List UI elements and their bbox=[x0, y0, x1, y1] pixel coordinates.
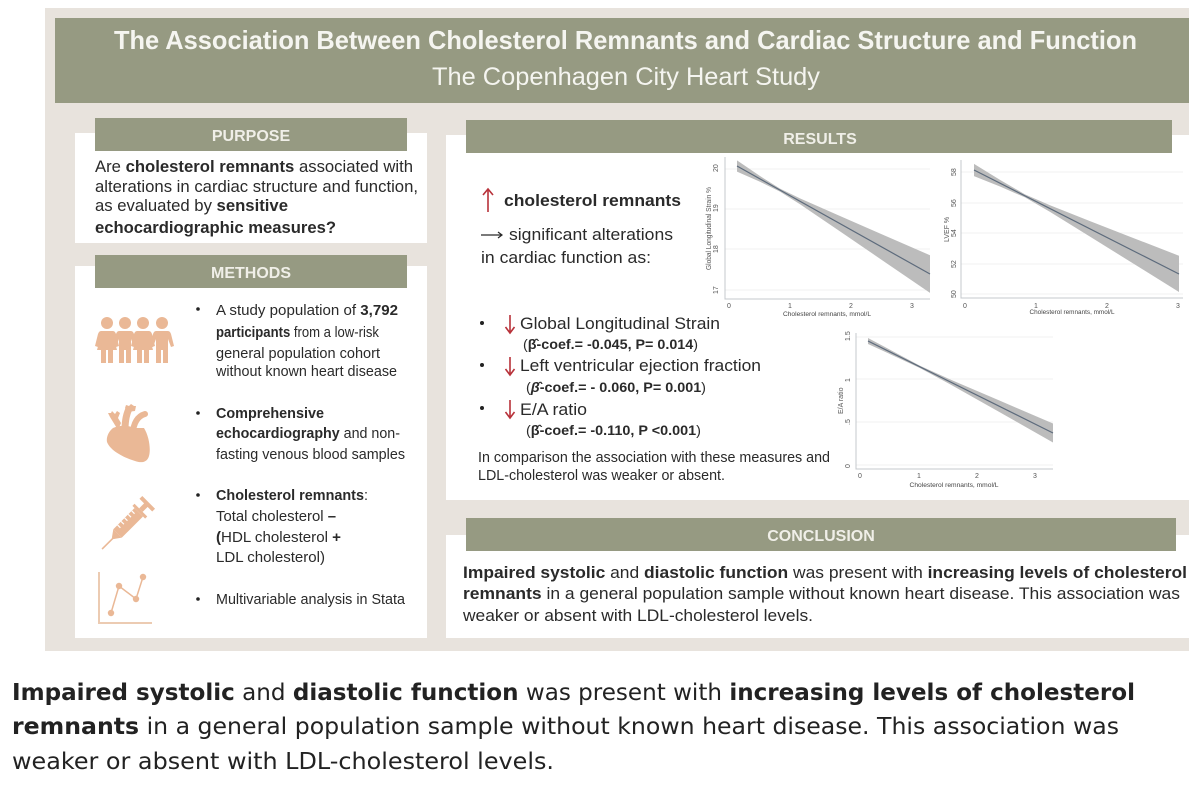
chart: E/A ratio: .5 bbox=[845, 419, 852, 425]
text block: cholesterol remnants: Total cholesterol – bbox=[216, 509, 336, 525]
icon: syringe bbox=[96, 496, 155, 555]
icon: up arrow bbox=[483, 189, 493, 212]
text block: analysis: Multivariable analysis in Stata bbox=[216, 592, 406, 608]
chart: global longitudinal strain: 3 bbox=[910, 303, 914, 310]
chart: LVEF: 1 bbox=[1034, 303, 1038, 310]
text block: cholesterol remnants: Cholesterol remnants: bbox=[216, 488, 368, 504]
panel: purpose: Are cholesterol remnants associated with bbox=[95, 157, 413, 176]
chart: E/A ratio: 2 bbox=[975, 473, 979, 480]
chart: global longitudinal strain: 19 bbox=[713, 204, 720, 212]
chart: global longitudinal strain: 18 bbox=[713, 245, 720, 253]
text block: echocardiography bbox=[196, 406, 405, 463]
title banner bbox=[55, 18, 1189, 103]
chart: LVEF: 2 bbox=[1105, 303, 1109, 310]
panel: conclusion: Impaired systolic and diastolic function was present with increasing levels of cholesterol bbox=[463, 564, 1187, 582]
title banner: The Association Between Cholesterol Remnants and Cardiac Structure and Function bbox=[114, 25, 1137, 55]
title banner: The Copenhagen City Heart Study bbox=[432, 63, 821, 91]
text block: comparison note bbox=[478, 450, 830, 484]
chart: E/A ratio: 1 bbox=[917, 473, 921, 480]
text block: echocardiography: echocardiography and non- bbox=[216, 426, 400, 442]
panel: purpose: echocardiographic measures? bbox=[95, 218, 336, 237]
chart: E/A ratio: E/A ratio bbox=[838, 387, 845, 414]
chart: E/A ratio: 3 bbox=[1033, 473, 1037, 480]
text block: comparison note: LDL-cholesterol was weaker or absent. bbox=[478, 468, 725, 484]
chart: global longitudinal strain: 0 bbox=[727, 303, 731, 310]
text block: comparison note: In comparison the association with these measures and bbox=[478, 450, 830, 466]
text block: study population: participants from a low-risk bbox=[216, 325, 380, 341]
text block: study population: without known heart disease bbox=[215, 364, 397, 380]
chart: global longitudinal strain: Cholesterol remnants, mmol/L bbox=[783, 311, 871, 318]
chart: E/A ratio bbox=[838, 331, 1053, 489]
panel: methods bbox=[75, 255, 427, 638]
chart: LVEF: 52 bbox=[951, 260, 958, 268]
chart: LVEF: 54 bbox=[951, 229, 958, 237]
panel: conclusion bbox=[446, 518, 1189, 638]
text block: global longitudinal strain: Global Longitudinal Strain bbox=[520, 314, 720, 333]
icon: heart bbox=[107, 404, 150, 462]
text block: key finding: cholesterol remnants bbox=[504, 191, 681, 210]
chart: global longitudinal strain: 20 bbox=[713, 164, 720, 172]
text block: cholesterol remnants: (HDL cholesterol + bbox=[216, 530, 341, 546]
chart: E/A ratio: 1 bbox=[845, 378, 852, 382]
poster bbox=[45, 8, 1189, 651]
text block: study population: general population cohort bbox=[216, 346, 380, 362]
panel: purpose: alterations in cardiac structure and function, bbox=[95, 177, 418, 196]
chart: LVEF: 0 bbox=[963, 303, 967, 310]
text block: echocardiography: Comprehensive bbox=[216, 406, 324, 422]
text block: ejection fraction: (β̂-coef.= - 0.060, P= 0.001 ) bbox=[526, 379, 706, 395]
text block: key finding bbox=[481, 191, 681, 267]
text block: key finding: in cardiac function as: bbox=[481, 248, 651, 267]
chart: LVEF: LVEF % bbox=[944, 217, 951, 242]
caption text: remnants in a general population sample without known heart disease. This association was bbox=[12, 714, 1119, 740]
caption text: weaker or absent with LDL-cholesterol levels. bbox=[12, 749, 554, 775]
caption text: Impaired systolic and diastolic function was present with increasing levels of cholesterol bbox=[12, 680, 1135, 706]
text block: global longitudinal strain: (β̂-coef.= -0.045, P= 0.014 ) bbox=[523, 336, 698, 352]
text block: E/A ratio: E/A ratio bbox=[520, 400, 587, 419]
text block: study population: A study population of 3,792 bbox=[216, 303, 398, 319]
chart: E/A ratio: 0 bbox=[858, 473, 862, 480]
text block: E/A ratio bbox=[480, 400, 701, 438]
chart: LVEF: Cholesterol remnants, mmol/L bbox=[1030, 309, 1115, 316]
text block: cholesterol remnants bbox=[196, 488, 368, 566]
chart: LVEF: 50 bbox=[951, 290, 958, 298]
icon: line chart bbox=[99, 572, 152, 623]
text block: study population bbox=[196, 303, 398, 380]
chart: global longitudinal strain bbox=[706, 157, 930, 318]
panel: methods: METHODS bbox=[211, 265, 291, 282]
chart: global longitudinal strain: 17 bbox=[713, 286, 720, 294]
chart: E/A ratio: Cholesterol remnants, mmol/L bbox=[910, 482, 999, 489]
chart: global longitudinal strain: 1 bbox=[788, 303, 792, 310]
chart: LVEF bbox=[944, 160, 1183, 316]
icon: people bbox=[95, 317, 174, 363]
panel: conclusion: weaker or absent with LDL-cholesterol levels. bbox=[462, 607, 813, 625]
text block: cholesterol remnants: LDL cholesterol) bbox=[216, 550, 325, 566]
text block: ejection fraction: Left ventricular ejection fraction bbox=[520, 356, 761, 375]
chart: global longitudinal strain: Global Longitudinal Strain % bbox=[706, 187, 713, 270]
panel: results bbox=[446, 120, 1189, 500]
chart: LVEF: 58 bbox=[951, 168, 958, 176]
chart: E/A ratio: 1.5 bbox=[845, 331, 852, 341]
text block: ejection fraction bbox=[480, 356, 761, 395]
panel: conclusion: CONCLUSION bbox=[767, 528, 875, 545]
text block: key finding: significant alterations bbox=[509, 225, 673, 244]
text block: echocardiography: fasting venous blood samples bbox=[216, 447, 405, 463]
chart: LVEF: 56 bbox=[951, 199, 958, 207]
panel: purpose: as evaluated by sensitive bbox=[95, 196, 288, 215]
chart: global longitudinal strain: 2 bbox=[849, 303, 853, 310]
panel: purpose: PURPOSE bbox=[212, 128, 290, 145]
panel: conclusion: remnants in a general population sample without known heart disease. This association was bbox=[463, 585, 1180, 603]
panel: purpose bbox=[75, 118, 427, 243]
text block: E/A ratio: (β̂-coef.= -0.110, P <0.001 ) bbox=[526, 422, 701, 438]
text block: global longitudinal strain bbox=[480, 314, 720, 352]
caption text bbox=[12, 680, 1135, 775]
chart: E/A ratio: 0 bbox=[845, 464, 852, 468]
chart: LVEF: 3 bbox=[1176, 303, 1180, 310]
panel: results: RESULTS bbox=[783, 131, 857, 148]
